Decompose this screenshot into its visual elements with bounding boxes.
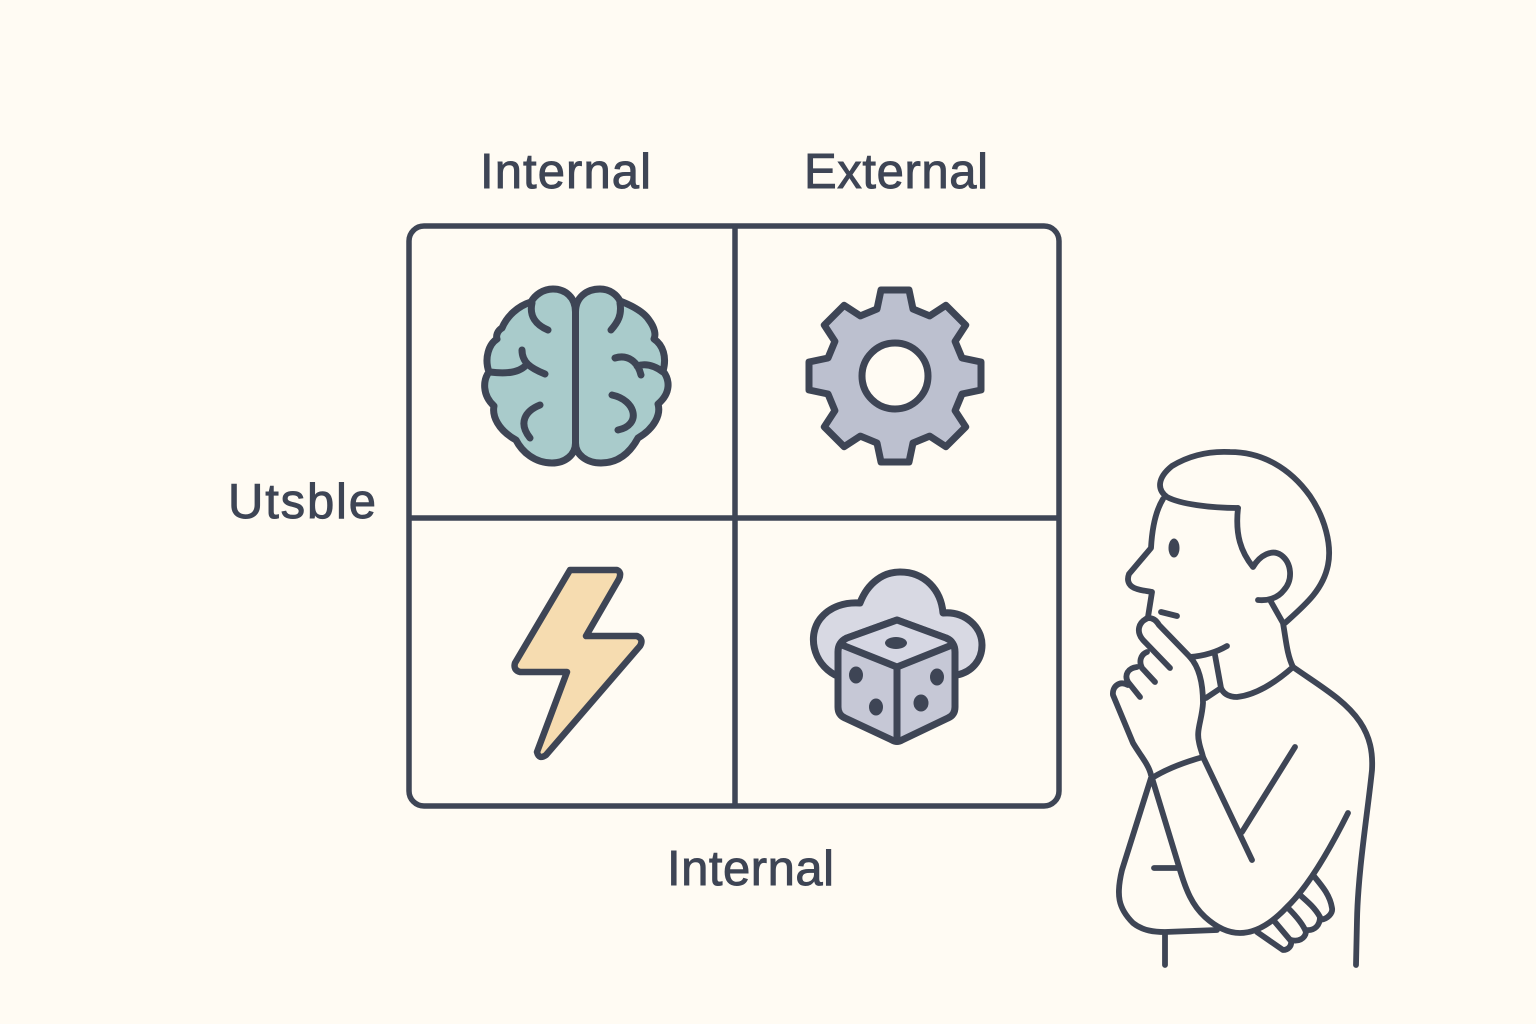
column heading: Internal: Internal bbox=[480, 145, 651, 199]
sideburn and ear bbox=[1237, 508, 1290, 600]
icon: dice in cloud bbox=[813, 572, 982, 742]
bottom label: Internal: Internal bbox=[667, 842, 834, 896]
row label: Utsble: Utsble bbox=[228, 475, 376, 529]
eye bbox=[1168, 538, 1180, 558]
cuff bbox=[1152, 757, 1203, 778]
icon: gear bbox=[809, 290, 981, 462]
fingers on arm bbox=[1257, 922, 1291, 950]
folded arm inner bbox=[1152, 778, 1348, 933]
face profile bbox=[1128, 499, 1163, 617]
icon: lightning bolt bbox=[515, 570, 641, 757]
hand at chin bbox=[1139, 618, 1252, 860]
collar bbox=[1206, 655, 1293, 698]
jaw bbox=[1190, 646, 1227, 657]
neck and shoulder bbox=[1270, 600, 1372, 965]
icon: brain bbox=[485, 289, 668, 463]
folded arm outer bbox=[1119, 778, 1217, 932]
upper arm bbox=[1242, 747, 1295, 832]
column heading: External: External bbox=[804, 145, 988, 199]
matrix grid bbox=[409, 226, 1059, 806]
figure: thinking man bbox=[1113, 452, 1372, 965]
mouth bbox=[1161, 612, 1177, 616]
hair and back of head bbox=[1160, 452, 1329, 623]
